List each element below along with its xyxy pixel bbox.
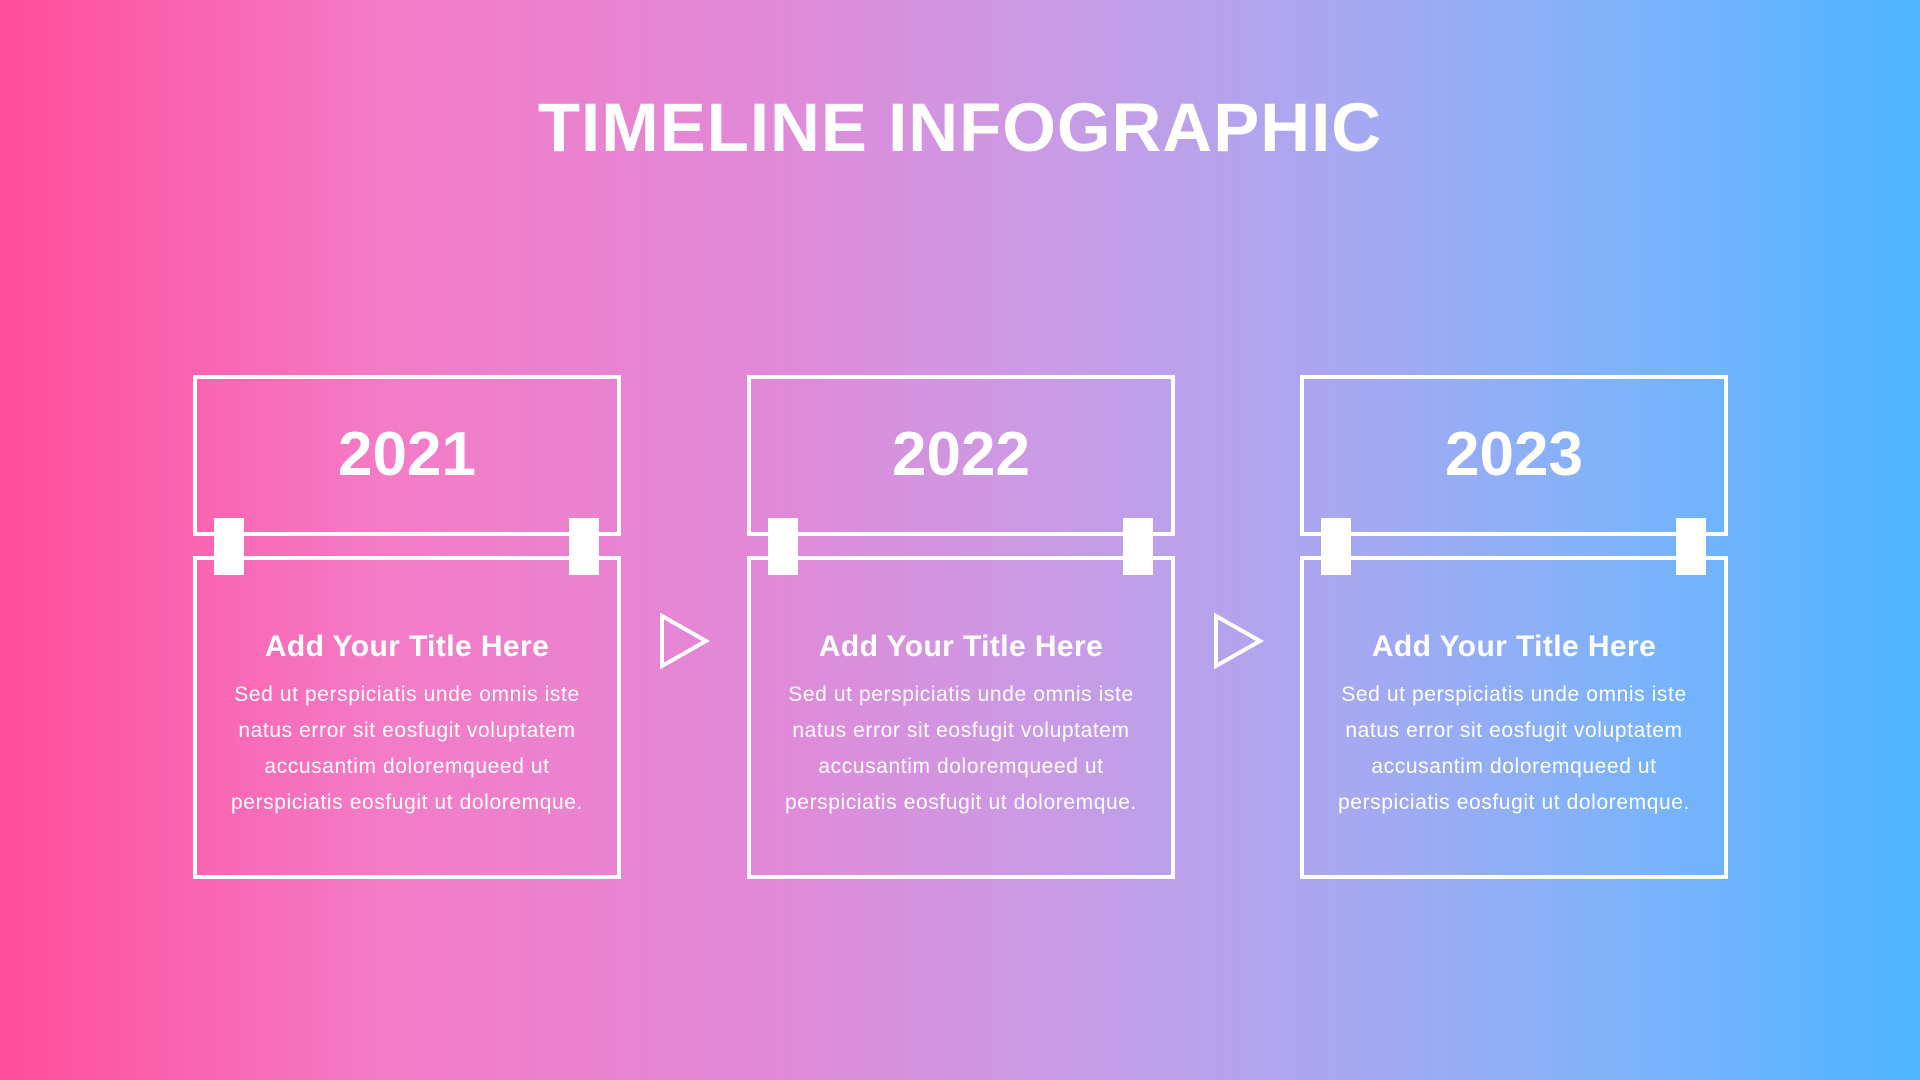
content box 2022: Sed ut perspiciatis unde omnis iste	[788, 683, 1134, 706]
tab right	[569, 518, 599, 575]
content box 2021	[193, 556, 621, 879]
tab left	[768, 518, 798, 575]
content box 2021: Sed ut perspiciatis unde omnis iste	[234, 683, 580, 706]
content box 2022: perspiciatis eosfugit ut doloremque.	[785, 791, 1137, 814]
panel: 2022	[747, 375, 1175, 879]
content box 2023	[1300, 556, 1728, 879]
panel: 2021	[193, 375, 621, 879]
year box 2021	[193, 375, 621, 536]
content box 2022	[747, 556, 1175, 879]
arrow 2	[1214, 612, 1264, 670]
panel: 2023	[1300, 375, 1728, 879]
year box 2022: 2022	[892, 420, 1030, 489]
content box 2021: Add Your Title Here	[265, 630, 549, 663]
content box 2023: natus error sit eosfugit voluptatem	[1345, 719, 1683, 742]
year box 2021: 2021	[338, 420, 476, 489]
year box 2023	[1300, 375, 1728, 536]
content box 2021: accusantim doloremqueed ut	[264, 755, 550, 778]
year box 2022	[747, 375, 1175, 536]
tab left	[1321, 518, 1351, 575]
content box 2022: accusantim doloremqueed ut	[818, 755, 1104, 778]
tab left	[214, 518, 244, 575]
arrow 1	[660, 612, 710, 670]
content box 2023: Sed ut perspiciatis unde omnis iste	[1341, 683, 1687, 706]
content box 2021: perspiciatis eosfugit ut doloremque.	[231, 791, 583, 814]
content box 2023: perspiciatis eosfugit ut doloremque.	[1338, 791, 1690, 814]
tab right	[1676, 518, 1706, 575]
content box 2021: natus error sit eosfugit voluptatem	[238, 719, 576, 742]
content box 2023: Add Your Title Here	[1372, 630, 1656, 663]
content box 2023: accusantim doloremqueed ut	[1371, 755, 1657, 778]
content box 2022: Add Your Title Here	[819, 630, 1103, 663]
content box 2022: natus error sit eosfugit voluptatem	[792, 719, 1130, 742]
tab right	[1123, 518, 1153, 575]
year box 2023: 2023	[1445, 420, 1583, 489]
title: TIMELINE INFOGRAPHIC	[538, 89, 1382, 166]
